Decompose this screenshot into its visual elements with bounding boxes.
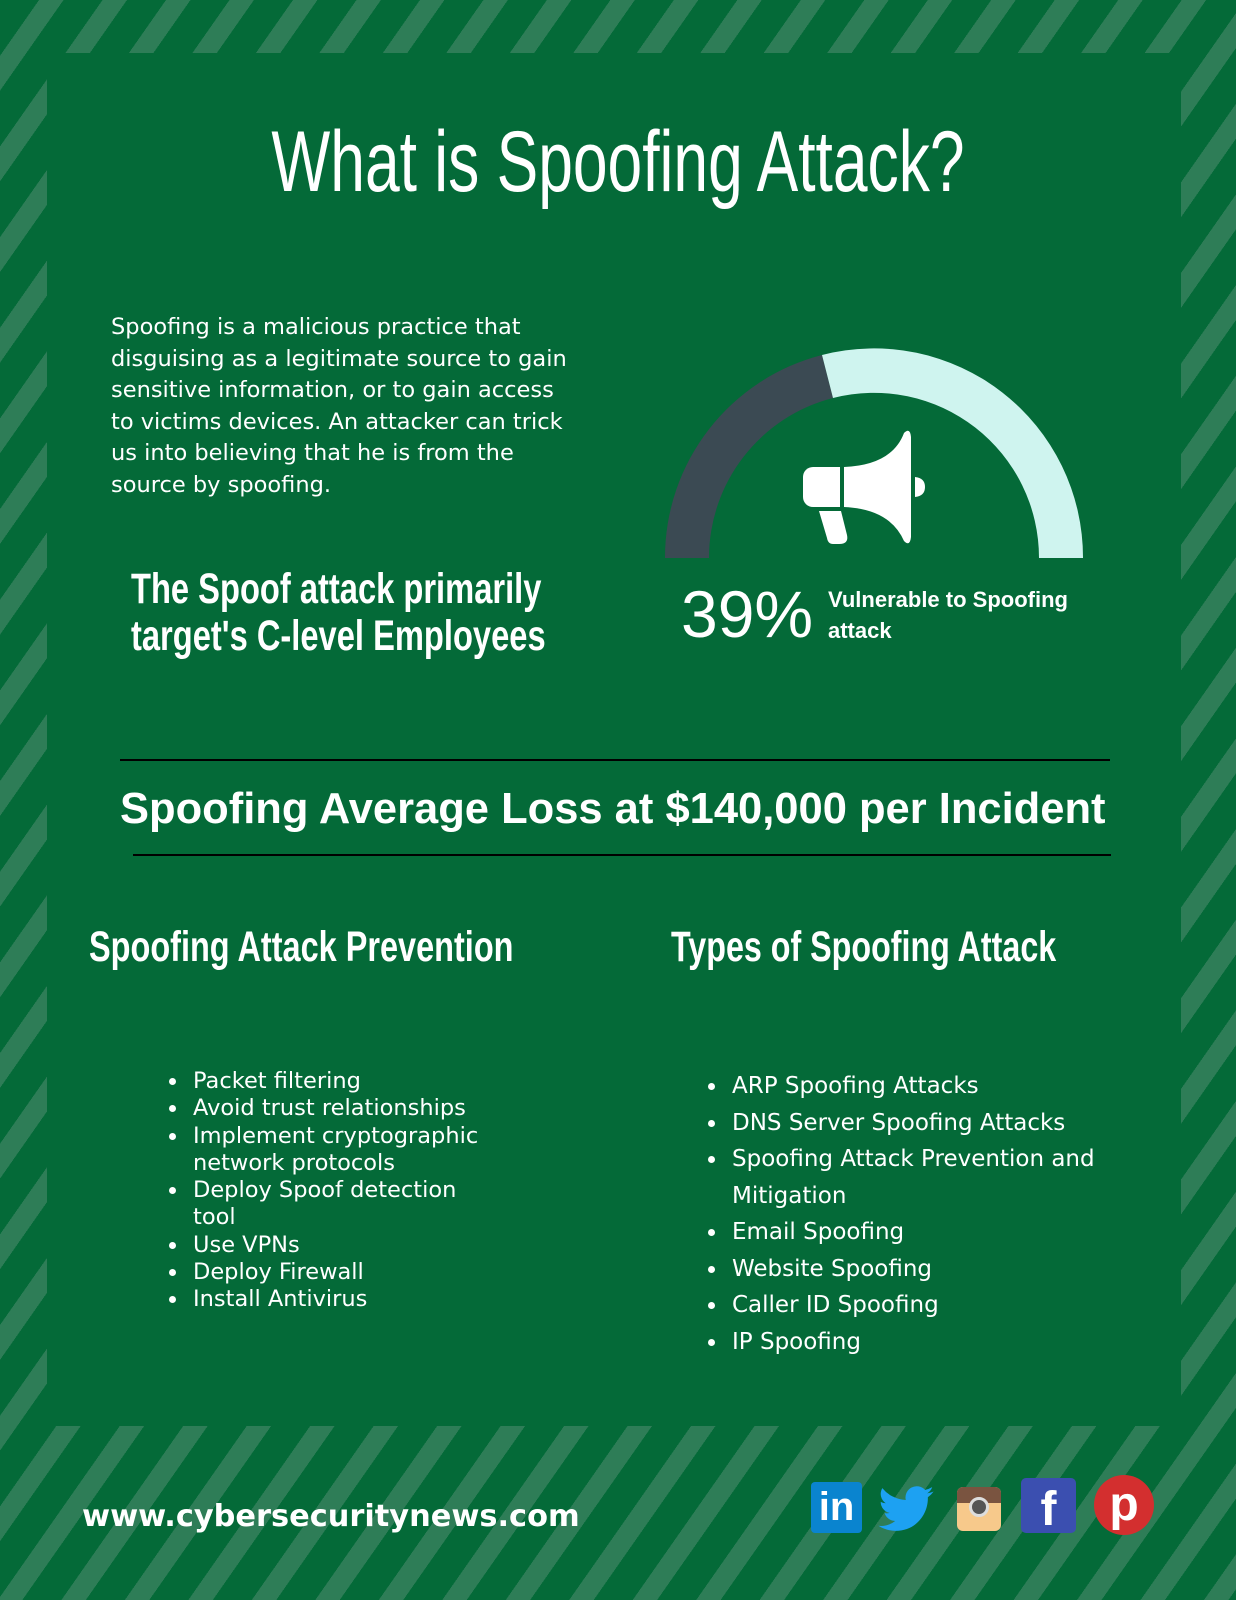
icons: social	[811, 1475, 1154, 1536]
heading: prevention: Spoofing Attack Prevention	[89, 923, 513, 971]
stat: 39%: 39%	[681, 577, 813, 651]
list: types: IP Spoofing	[732, 1328, 861, 1354]
list: types: Spoofing Attack Prevention and Mitigation	[732, 1146, 1095, 1208]
icon: instagram	[957, 1487, 1001, 1531]
icon: linkedin	[811, 1482, 862, 1533]
heading: average loss: Spoofing Average Loss at $140,000 per Incident	[120, 785, 1106, 833]
icon: pinterest	[1094, 1475, 1154, 1535]
list: prevention: Use VPNs	[193, 1232, 300, 1258]
title: What is Spoofing Attack?	[271, 114, 965, 210]
subheading: target	[131, 565, 546, 660]
subheading: target: target's C-level Employees	[131, 612, 546, 660]
list: prevention: Avoid trust relationships	[193, 1095, 466, 1121]
icon: megaphone	[803, 431, 925, 544]
list: prevention: Deploy Firewall	[193, 1259, 364, 1285]
list: types	[708, 1073, 1095, 1354]
list: types: DNS Server Spoofing Attacks	[732, 1110, 1065, 1136]
list: prevention: Deploy Spoof detection tool	[193, 1177, 456, 1230]
footer url: www.cybersecuritynews.com	[82, 1499, 580, 1534]
panel: main	[47, 53, 1181, 1426]
list: types: Website Spoofing	[732, 1256, 932, 1282]
stat label	[828, 587, 1068, 643]
list: types: ARP Spoofing Attacks	[732, 1073, 979, 1099]
gauge chart	[665, 348, 1083, 558]
icon: facebook: f	[1040, 1483, 1056, 1536]
list: prevention: Install Antivirus	[193, 1286, 367, 1312]
stat label: attack	[828, 618, 892, 643]
list: types: Caller ID Spoofing	[732, 1292, 939, 1318]
icon: linkedin: in	[819, 1485, 854, 1529]
subheading: target: The Spoof attack primarily	[131, 565, 541, 613]
icon: twitter	[878, 1486, 934, 1531]
list: prevention: Implement cryptographic network protocols	[193, 1123, 478, 1176]
list: types: Email Spoofing	[732, 1219, 904, 1245]
intro paragraph: Spoofing is a malicious practice that disguising as a legitimate source to gain sensitive information, or to gain access to victims devices. An attacker can trick us into believing that he is from the source by spoofing.	[111, 314, 567, 498]
icon: facebook	[1021, 1478, 1076, 1533]
icon: pinterest: p	[1109, 1478, 1139, 1531]
stat label: Vulnerable to Spoofing	[828, 587, 1068, 612]
heading: types: Types of Spoofing Attack	[671, 923, 1056, 971]
list: prevention: Packet filtering	[193, 1068, 361, 1094]
list: prevention	[169, 1068, 478, 1312]
